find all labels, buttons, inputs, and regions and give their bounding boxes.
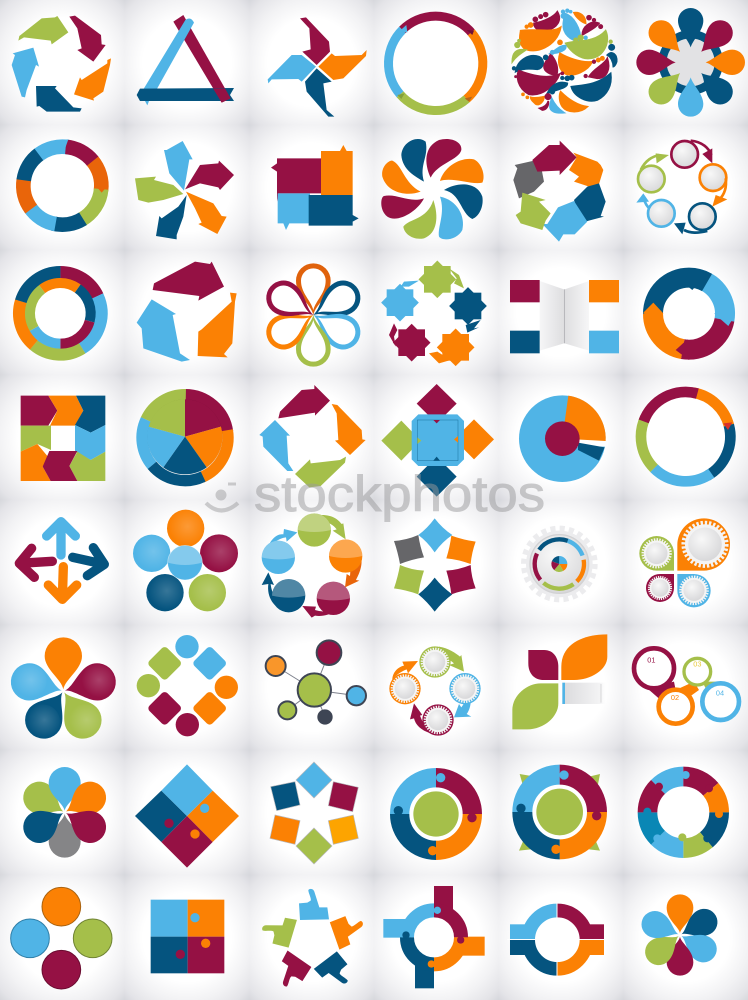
- icon: jigsaw ring with corner triangles: [516, 770, 601, 854]
- icon: five stars with arrows: [381, 260, 487, 366]
- icon: eight piece jigsaw ring: [633, 762, 734, 863]
- icon: open book banners: [510, 280, 619, 353]
- icon: triangle of bands: [137, 15, 234, 105]
- icon: six block arrow ring: [513, 141, 606, 242]
- icon: jigsaw diamond: [135, 764, 239, 868]
- icon: square of four tabbed blocks: [271, 145, 359, 230]
- icon: numbered linked rings: 01: [647, 656, 655, 665]
- icon: diamond of circles and rounded squares: [137, 635, 238, 736]
- icon: jigsaw square: [151, 900, 224, 973]
- icon: donut pie with maroon hub: [519, 395, 608, 482]
- icon: thick arrow ring: [643, 268, 735, 360]
- icon: numbered linked rings: 03: [693, 659, 701, 668]
- icon: central square with four diamonds: [381, 384, 494, 497]
- icon: double ring segments: [2, 255, 118, 371]
- icon: thin ring of five arrows: [622, 373, 748, 500]
- icon: glossy five ball flower: [133, 510, 238, 611]
- icon: segmented arrow ring: [7, 131, 117, 241]
- icon: five thumbs ring: [259, 889, 368, 994]
- icon: leaf quadrant: [512, 634, 607, 729]
- icon: pentagon arrow cycle: [12, 16, 111, 112]
- icon: four leaf gears: [639, 518, 730, 607]
- icon: gear with segmented wheel: [524, 529, 594, 599]
- icon: six petal flower: [17, 767, 112, 858]
- icon: glossy ball cycle with arrows: [262, 513, 362, 618]
- icon: diamond arrow cycle: [259, 385, 366, 487]
- icon: four rounded arrows: [19, 522, 104, 599]
- icon: three large folded arrows: [137, 262, 237, 362]
- icon: eight petal flower with star core: [636, 8, 745, 117]
- icon: paisley circle: [512, 9, 617, 113]
- icon: glossy five petal teardrops: [7, 637, 120, 746]
- icon: six drop flower: [637, 894, 722, 976]
- icon: ring with four offset tabs: [383, 886, 485, 988]
- icon: five ring cycle with arrows: [636, 141, 727, 234]
- icon: pie with arrow rim: [124, 377, 246, 498]
- icon: six concave diamonds star: [394, 518, 476, 612]
- icon: five arrow fan: [135, 141, 234, 239]
- icon: numbered linked rings: 04: [716, 688, 724, 697]
- icon: four large circles: [11, 887, 112, 989]
- icon: numbered linked rings: 02: [671, 693, 679, 702]
- icon: hub and satellite network: [266, 640, 366, 725]
- icon: swirl of eight commas: [381, 139, 484, 239]
- icon: four gear cycle: [389, 646, 481, 736]
- icon: thin ring with triangle joints: [369, 0, 502, 130]
- icon: square mosaic of chevrons: [21, 396, 105, 481]
- icon: ring of six squares: [270, 762, 358, 864]
- icon: jigsaw ring with green centre: [394, 773, 477, 855]
- watermark: stockphotos: stockphotos: [254, 466, 545, 522]
- icon: ring with side banners: [507, 902, 607, 978]
- icon: numbered linked rings: [634, 648, 739, 724]
- icon: six outlined petals: [260, 263, 367, 367]
- icon: pinwheel of four arrows: [268, 17, 367, 117]
